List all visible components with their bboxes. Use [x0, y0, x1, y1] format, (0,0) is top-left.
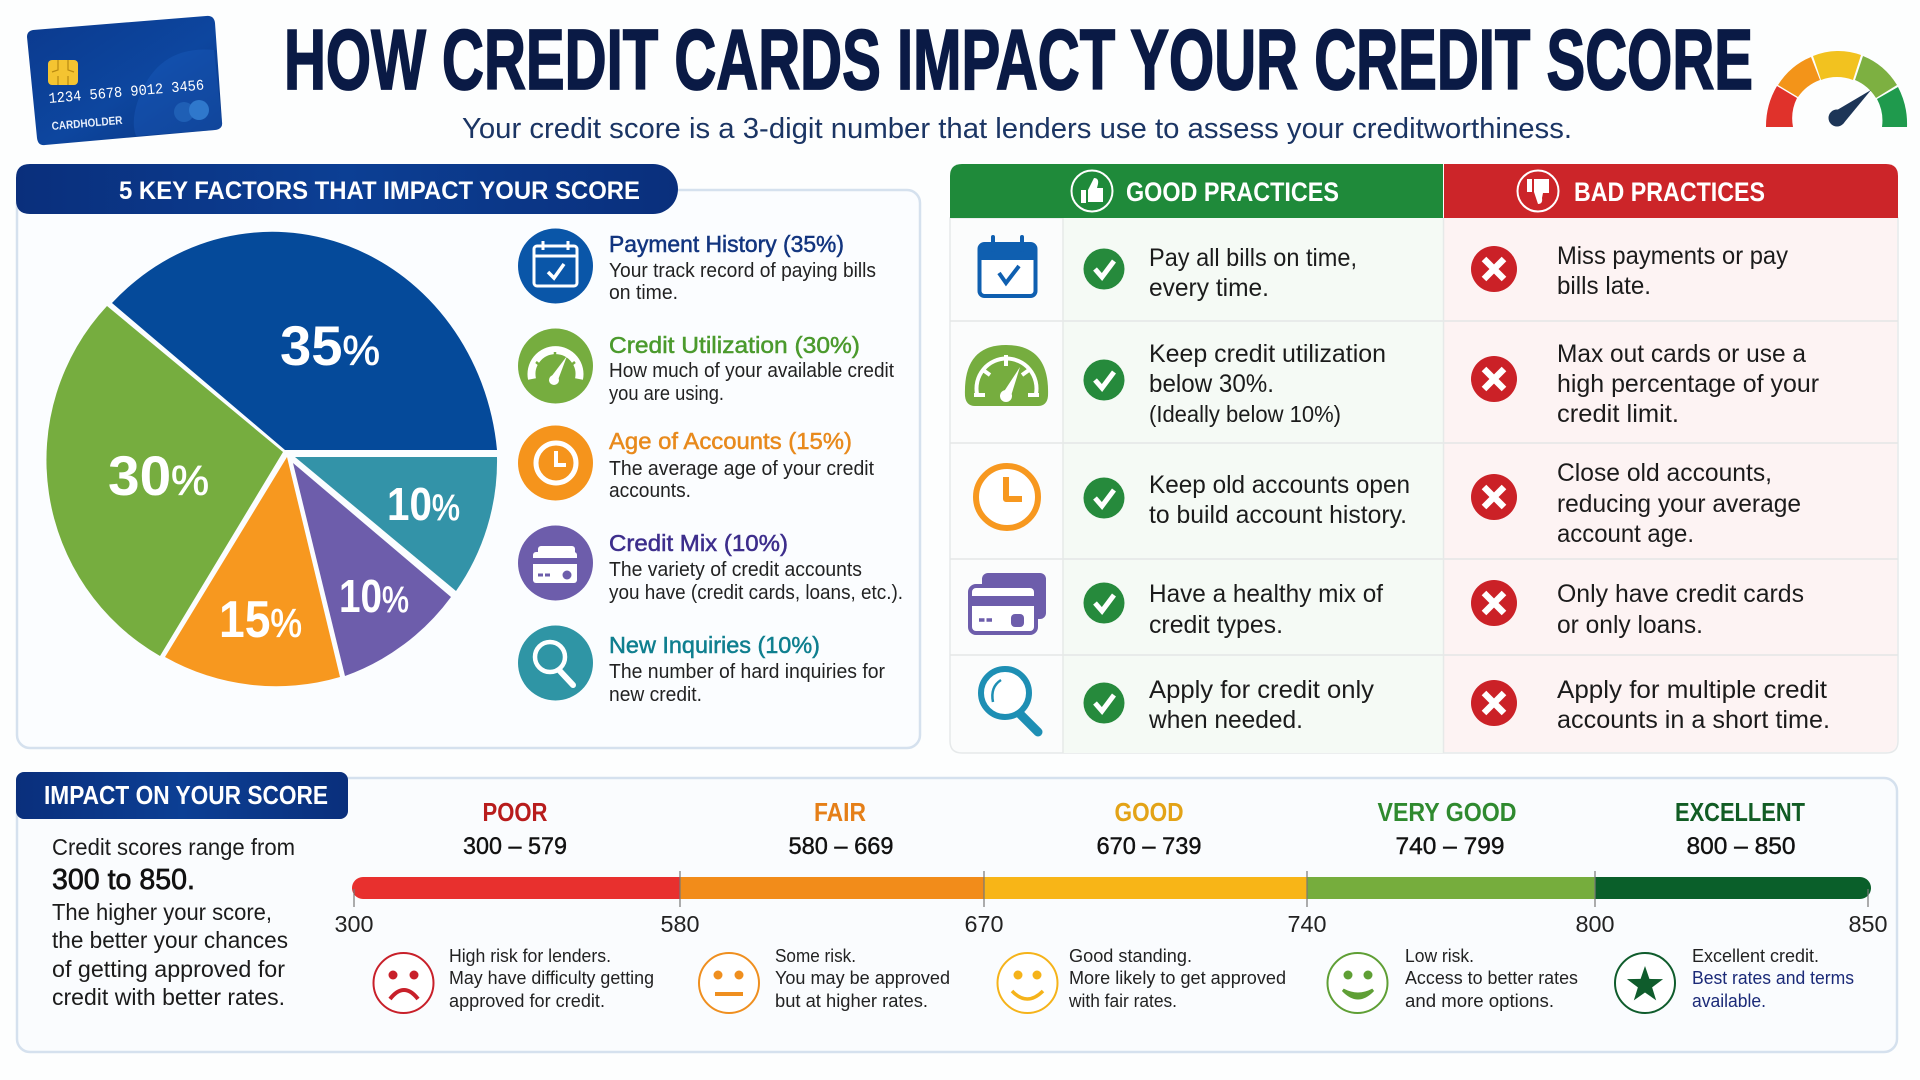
icon: credit card: CARDHOLDER — [51, 115, 124, 133]
risk: very good — [1328, 945, 1578, 1013]
header: bad practices: BAD PRACTICES — [1574, 177, 1765, 207]
good practices text: below 30%. — [1149, 370, 1274, 398]
factor: credit mix: you have (credit cards, loans, etc.). — [609, 582, 903, 604]
risk: very good: Low risk. — [1405, 945, 1474, 966]
bad practices text: Apply for multiple credit — [1557, 676, 1827, 704]
bad practices text: or only loans. — [1557, 611, 1703, 639]
good practices text: when needed. — [1148, 706, 1303, 734]
score range bar: 670 — [964, 911, 1004, 937]
bad practices text: credit limit. — [1557, 400, 1679, 428]
factor: age of accounts: Age of Accounts (15%) — [609, 428, 852, 454]
score range bar: 580 — [660, 911, 700, 937]
score range bar — [334, 871, 1888, 937]
bad practices text: Max out cards or use a — [1557, 340, 1806, 368]
header: bad practices — [1444, 164, 1898, 218]
bad practices text — [1557, 242, 1830, 734]
header: good practices: GOOD PRACTICES — [1126, 177, 1339, 207]
score range bar: 740 — [1288, 911, 1326, 937]
score band labels: FAIR — [814, 797, 866, 827]
factor: credit utilization: you are using. — [609, 383, 724, 405]
text block: score range — [52, 834, 295, 1010]
factor: payment history: Your track record of paying bills — [609, 260, 876, 282]
icon: calendar — [980, 237, 1036, 296]
subtitle: Your credit score is a 3-digit number that lenders use to assess your creditworthiness. — [462, 113, 1572, 145]
bad practices text: Only have credit cards — [1557, 580, 1804, 608]
factor: credit utilization: How much of your available credit — [609, 360, 894, 382]
text block: score range: Credit scores range from — [52, 834, 295, 860]
risk: excellent: Best rates and terms — [1692, 967, 1854, 988]
factor: credit mix: Credit Mix (10%) — [609, 530, 788, 556]
bad practices text: account age. — [1557, 520, 1694, 548]
text block: score range: of getting approved for — [52, 956, 285, 982]
pie chart: 35% — [280, 314, 380, 377]
factor: payment history: on time. — [609, 282, 678, 304]
good practices text: every time. — [1149, 274, 1269, 302]
icon: speedometer — [965, 345, 1048, 406]
score band labels — [463, 797, 1805, 860]
factor: credit utilization: Credit Utilization (30%) — [609, 332, 860, 358]
score band labels: 580 – 669 — [788, 833, 894, 860]
good practices text: to build account history. — [1149, 501, 1407, 529]
factor: age of accounts — [518, 426, 874, 502]
bad practices text: high percentage of your — [1557, 370, 1819, 398]
panel: key factors — [16, 164, 920, 748]
pie chart — [46, 232, 497, 686]
score band labels: 670 – 739 — [1096, 833, 1202, 860]
header: good practices — [950, 164, 1443, 218]
icon: clock — [976, 466, 1038, 528]
risk: fair — [699, 945, 950, 1013]
panel: impact on your score — [16, 772, 1897, 1052]
risk: poor — [374, 945, 654, 1013]
panel: practices table — [950, 164, 1898, 753]
bad practices text: Miss payments or pay — [1557, 242, 1788, 270]
icon: credit score gauge — [1766, 51, 1907, 127]
factor: age of accounts: accounts. — [609, 480, 691, 502]
score range bar: 800 — [1576, 911, 1614, 937]
risk: poor: High risk for lenders. — [449, 945, 611, 966]
good practices text: Keep credit utilization — [1149, 340, 1386, 368]
icon: magnifier — [981, 669, 1038, 732]
pie chart: 30% — [108, 444, 209, 507]
risk: very good: Access to better rates — [1405, 967, 1578, 988]
good practices text — [1148, 244, 1410, 734]
bad practices text: Close old accounts, — [1557, 459, 1772, 487]
risk: poor: May have difficulty getting — [449, 967, 654, 988]
factor: payment history: Payment History (35%) — [609, 231, 844, 257]
factor: new inquiries — [518, 626, 885, 706]
factor: credit utilization — [518, 328, 894, 405]
factor: new inquiries: The number of hard inquiries for — [609, 661, 885, 683]
risk: good: with fair rates. — [1068, 990, 1177, 1011]
risk: very good: and more options. — [1405, 990, 1554, 1011]
good practices text: Keep old accounts open — [1149, 471, 1410, 499]
factor: age of accounts: The average age of your credit — [609, 458, 874, 480]
bad practices text: bills late. — [1557, 272, 1651, 300]
text block: score range: The higher your score, — [52, 899, 272, 925]
risk: excellent: Excellent credit. — [1692, 945, 1819, 966]
pie chart: 10% — [387, 478, 460, 530]
risk: good — [998, 945, 1286, 1013]
heading: key factors: 5 KEY FACTORS THAT IMPACT YOUR SCORE — [119, 177, 640, 205]
risk: good: Good standing. — [1069, 945, 1192, 966]
good practices text: Have a healthy mix of — [1149, 580, 1383, 608]
risk: good: More likely to get approved — [1069, 967, 1286, 988]
score range bar: 850 — [1848, 911, 1888, 937]
good practices: check marks — [1084, 248, 1124, 724]
score band labels: GOOD — [1114, 797, 1184, 827]
score range bar: 300 — [334, 911, 374, 937]
factor: new inquiries: new credit. — [609, 684, 702, 706]
good practices text: Pay all bills on time, — [1149, 244, 1357, 272]
good practices text: Apply for credit only — [1149, 676, 1375, 704]
pie chart: 10% — [339, 570, 409, 622]
text block: score range: credit with better rates. — [52, 984, 285, 1010]
factor: credit mix — [518, 526, 903, 604]
score band labels: 740 – 799 — [1396, 833, 1504, 860]
factor: new inquiries: New Inquiries (10%) — [609, 632, 820, 658]
icon: credit card: 1234 5678 9012 3456 — [48, 77, 205, 108]
score band labels: 800 – 850 — [1686, 833, 1796, 860]
pie chart: 15% — [219, 591, 302, 649]
text block: score range: the better your chances — [52, 927, 288, 953]
heading: impact: IMPACT ON YOUR SCORE — [44, 780, 328, 810]
risk: excellent: available. — [1692, 990, 1766, 1011]
text block: score range: 300 to 850. — [52, 864, 195, 896]
bad practices text: reducing your average — [1557, 490, 1801, 518]
factor: payment history — [518, 228, 876, 304]
score band labels: POOR — [482, 797, 548, 827]
risk: excellent — [1615, 945, 1854, 1013]
bad practices text: accounts in a short time. — [1557, 706, 1830, 734]
score band labels: VERY GOOD — [1378, 797, 1516, 827]
heading: key factors — [16, 164, 678, 214]
factor: credit mix: The variety of credit accounts — [609, 559, 862, 581]
risk: poor: approved for credit. — [449, 990, 605, 1011]
icon: credit cards — [970, 573, 1046, 633]
icon: credit card — [27, 16, 222, 145]
bad practices: cross marks — [1471, 246, 1517, 726]
good practices text: (Ideally below 10%) — [1149, 401, 1341, 427]
score band labels: EXCELLENT — [1675, 797, 1805, 827]
risk: fair: Some risk. — [775, 945, 856, 966]
risk: fair: but at higher rates. — [775, 990, 928, 1011]
heading: impact — [16, 772, 348, 819]
risk: fair: You may be approved — [775, 967, 950, 988]
good practices text: credit types. — [1149, 611, 1283, 639]
score band labels: 300 – 579 — [463, 833, 567, 860]
